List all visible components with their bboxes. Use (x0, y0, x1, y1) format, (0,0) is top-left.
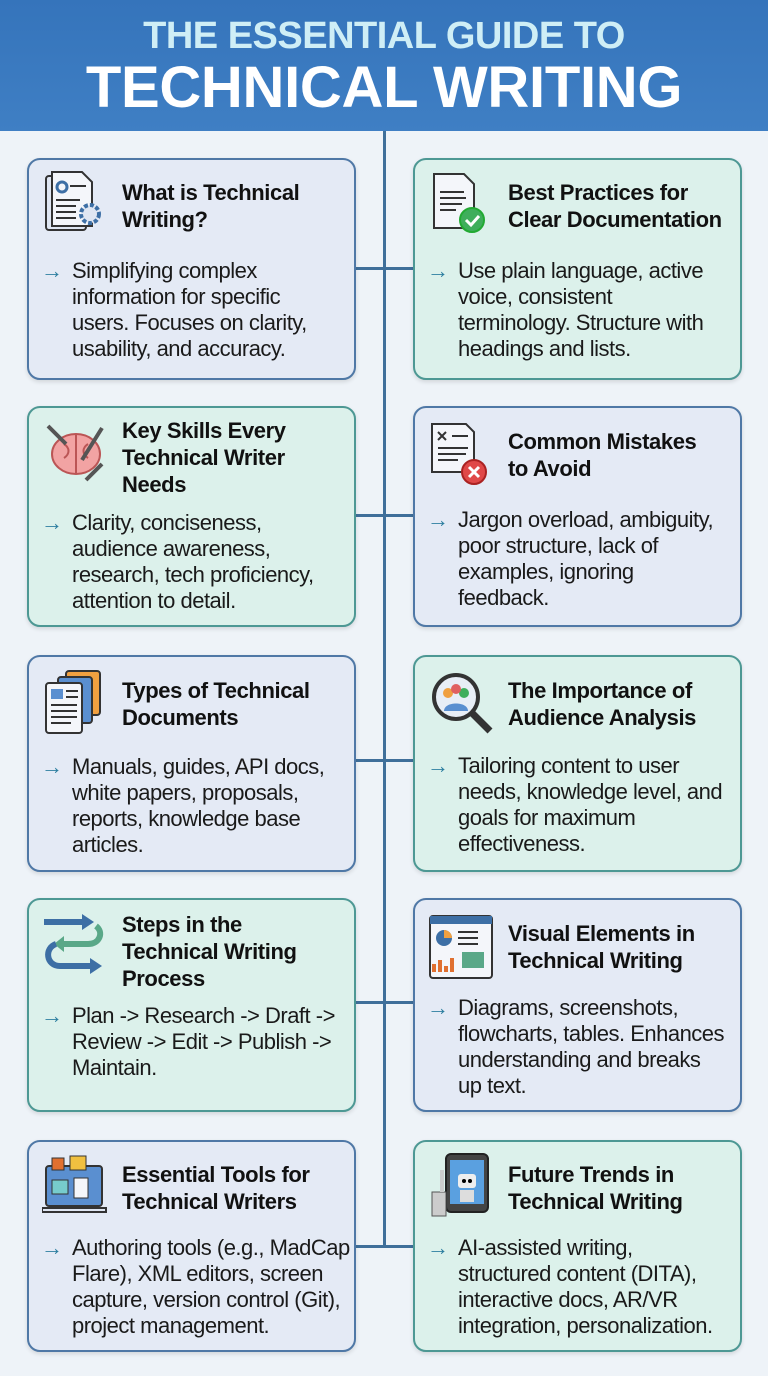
heading: Documents (122, 705, 238, 730)
panel: audience analysis: effectiveness. (458, 831, 585, 856)
text: → (41, 1235, 63, 1260)
panel: best practices: headings and lists. (458, 336, 631, 361)
heading: Needs (122, 472, 186, 497)
title line 1: THE ESSENTIAL GUIDE TO (143, 15, 625, 57)
text: → (427, 258, 449, 283)
panel: essential tools: project management. (72, 1313, 269, 1338)
heading: Essential Tools for (122, 1162, 310, 1187)
heading: Process (122, 966, 205, 991)
heading: Common Mistakes (508, 429, 696, 454)
panel: best practices (413, 158, 742, 380)
panel: best practices: Use plain language, active (458, 258, 703, 283)
panel: key skills: attention to detail. (72, 588, 236, 613)
icon: document x (431, 423, 487, 485)
panel: audience analysis: Tailoring content to user (458, 753, 679, 778)
heading (122, 1162, 310, 1214)
panel: steps in process: Plan -> Research -> Draft -> (72, 1003, 335, 1028)
heading (508, 678, 696, 730)
heading (122, 912, 297, 991)
heading: Best Practices for (508, 180, 688, 205)
panel: what is technical writing: Simplifying complex (72, 258, 257, 283)
heading: Types of Technical (122, 678, 310, 703)
panel: types of documents: white papers, proposals, (72, 780, 298, 805)
panel: common mistakes: Jargon overload, ambiguity, (458, 507, 713, 532)
icon: charts window (429, 915, 493, 979)
panel: types of documents: reports, knowledge base (72, 806, 300, 831)
icon: stacked documents (45, 670, 101, 734)
panel: future trends: interactive docs, AR/VR (458, 1287, 678, 1312)
panel: essential tools: Flare), XML editors, screen (72, 1261, 323, 1286)
icon: document check (433, 173, 485, 233)
panel: steps in process (27, 898, 356, 1112)
heading: Technical Writer (122, 445, 285, 470)
panel: visual elements: flowcharts, tables. Enhances (458, 1021, 724, 1046)
panel: visual elements: understanding and breaks (458, 1047, 700, 1072)
heading (508, 1162, 683, 1214)
panel: future trends (413, 1140, 742, 1352)
text: → (427, 995, 449, 1020)
text: → (427, 1235, 449, 1260)
heading: Visual Elements in (508, 921, 695, 946)
panel: essential tools: capture, version control (Git), (72, 1287, 340, 1312)
heading: Steps in the (122, 912, 242, 937)
panel: visual elements (413, 898, 742, 1112)
panel: common mistakes: feedback. (458, 585, 549, 610)
heading (122, 678, 310, 730)
icon: document gears (45, 171, 101, 231)
heading: Technical Writing (122, 939, 297, 964)
heading (508, 921, 695, 973)
panel: audience analysis: goals for maximum (458, 805, 635, 830)
panel: what is technical writing (27, 158, 356, 380)
icon: laptop tools (42, 1156, 107, 1213)
header (0, 0, 768, 131)
panel: common mistakes (413, 406, 742, 627)
panel: future trends: AI-assisted writing, (458, 1235, 633, 1260)
heading (508, 180, 722, 232)
heading: What is Technical (122, 180, 299, 205)
heading: The Importance of (508, 678, 692, 703)
heading (122, 180, 299, 232)
panel: what is technical writing: information for specific (72, 284, 280, 309)
icon: robot tablet (432, 1153, 489, 1216)
heading: Technical Writers (122, 1189, 297, 1214)
heading: Audience Analysis (508, 705, 696, 730)
heading: Future Trends in (508, 1162, 674, 1187)
panel: visual elements: Diagrams, screenshots, (458, 995, 678, 1020)
panel: best practices: voice, consistent (458, 284, 612, 309)
title line 2: TECHNICAL WRITING (86, 55, 682, 120)
text: → (427, 753, 449, 778)
heading: Key Skills Every (122, 418, 286, 443)
central timeline line (383, 131, 386, 1247)
panel: what is technical writing: users. Focuses on clarity, (72, 310, 307, 335)
panel: steps in process: Maintain. (72, 1055, 157, 1080)
text: → (427, 507, 449, 532)
icon: process arrows (44, 914, 104, 974)
panel: types of documents (27, 655, 356, 872)
panel: future trends: integration, personalization. (458, 1313, 713, 1338)
heading (508, 429, 696, 481)
panel: audience analysis (413, 655, 742, 872)
icon: magnifier people (432, 673, 492, 734)
panel: key skills: Clarity, conciseness, (72, 510, 262, 535)
heading: Technical Writing (508, 948, 683, 973)
heading: Technical Writing (508, 1189, 683, 1214)
panel: types of documents: articles. (72, 832, 143, 857)
panel: key skills (27, 406, 356, 627)
heading: Writing? (122, 207, 208, 232)
panel: essential tools: Authoring tools (e.g., MadCap (72, 1235, 350, 1260)
panel: future trends: structured content (DITA), (458, 1261, 696, 1286)
text: → (41, 1003, 63, 1028)
panel: visual elements: up text. (458, 1073, 526, 1098)
panel: key skills: audience awareness, (72, 536, 270, 561)
panel: what is technical writing: usability, and accuracy. (72, 336, 285, 361)
icon: brain tools (46, 424, 104, 482)
heading: Clear Documentation (508, 207, 722, 232)
panel: common mistakes: examples, ignoring (458, 559, 634, 584)
heading: to Avoid (508, 456, 591, 481)
panel: common mistakes: poor structure, lack of (458, 533, 658, 558)
text: → (41, 258, 63, 283)
panel: best practices: terminology. Structure with (458, 310, 703, 335)
text: → (41, 510, 63, 535)
panel: types of documents: Manuals, guides, API docs, (72, 754, 324, 779)
text: → (41, 754, 63, 779)
panel: essential tools (27, 1140, 356, 1352)
panel: key skills: research, tech proficiency, (72, 562, 314, 587)
heading (122, 418, 286, 497)
panel: steps in process: Review -> Edit -> Publish -> (72, 1029, 331, 1054)
panel: audience analysis: needs, knowledge level, and (458, 779, 722, 804)
